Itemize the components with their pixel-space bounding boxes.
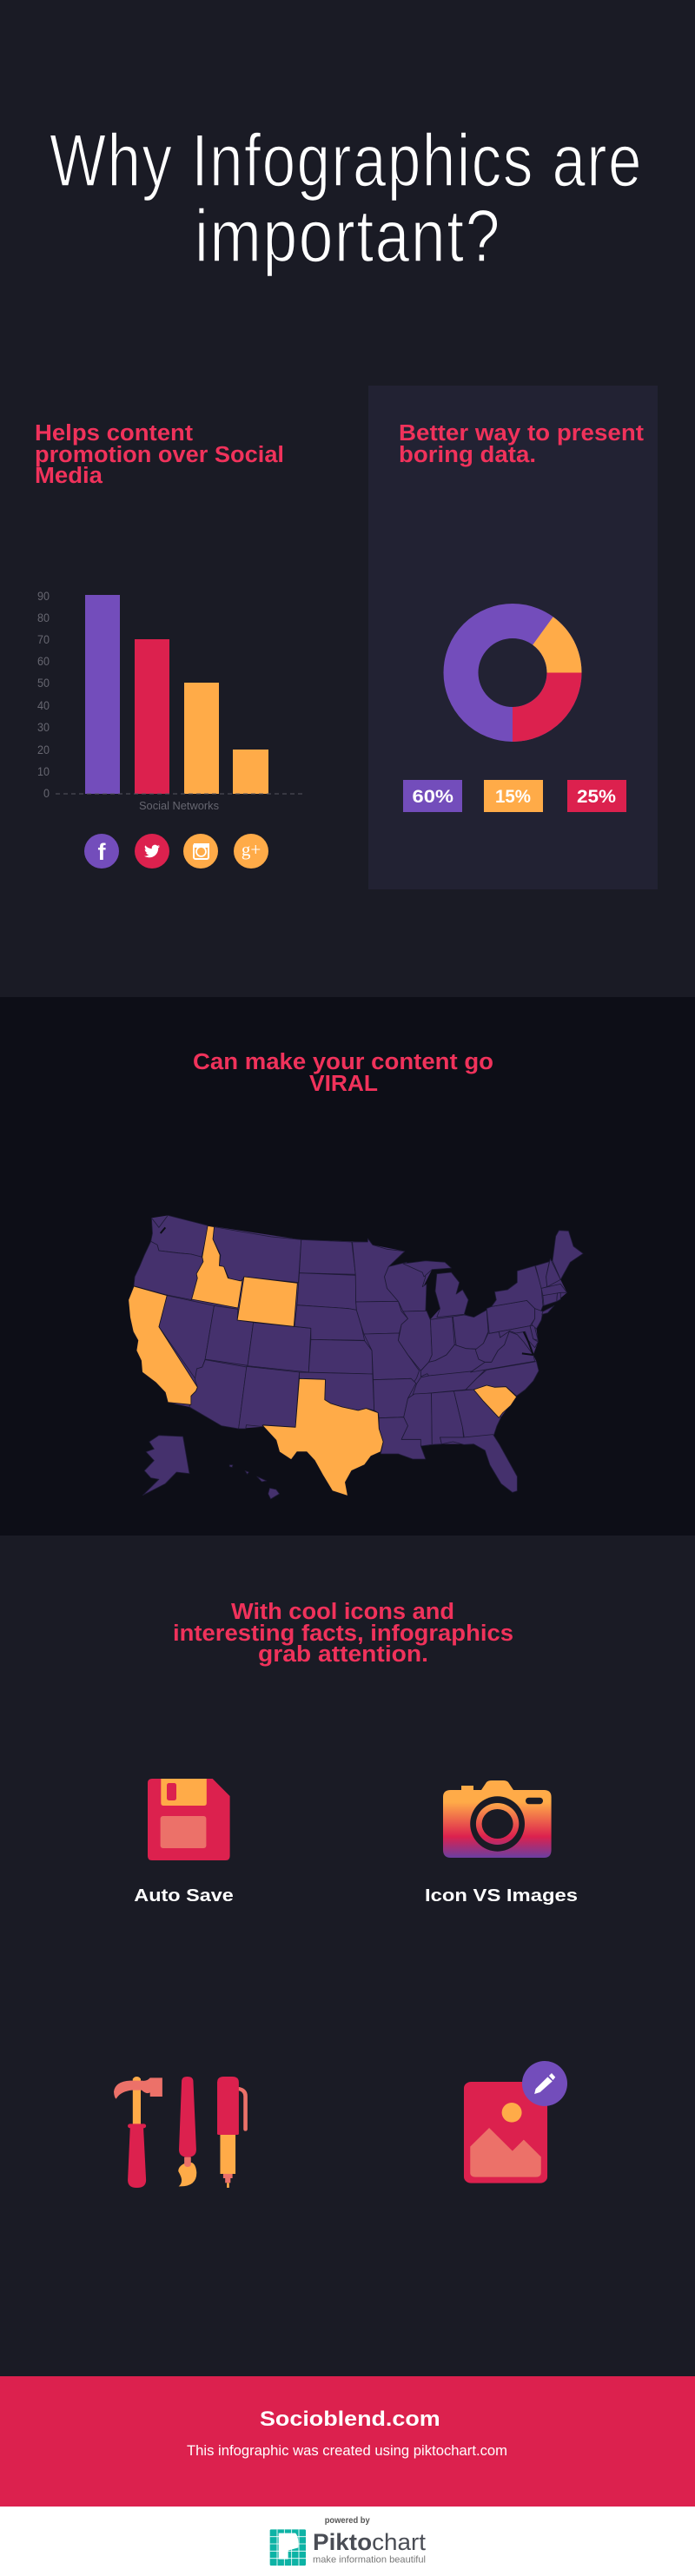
heading: cool icons: [173, 1600, 513, 1667]
legend: 25%: [567, 780, 626, 812]
panel: icons and facts: [114, 1600, 578, 2188]
legend: 25%: 25%: [577, 787, 616, 807]
logo wordmark: Piktochart: [313, 2529, 427, 2555]
powered by footer: [0, 2507, 695, 2576]
bar chart: 60: [37, 655, 50, 668]
legend: 15%: 15%: [495, 787, 531, 807]
footer banner: [0, 2376, 695, 2507]
icon: floppy disk: [148, 1779, 230, 1860]
label: auto save: Auto Save: [134, 1886, 234, 1906]
social icons: [84, 834, 268, 869]
bar chart: 70: [37, 633, 50, 646]
powered by text: powered by: [325, 2516, 370, 2526]
icon: google plus: [234, 834, 268, 869]
US map: [129, 1215, 583, 1499]
title: [50, 120, 643, 278]
heading: viral: VIRAL: [309, 1072, 378, 1096]
icon: tools: [114, 2077, 246, 2188]
label: icon vs images: Icon VS Images: [425, 1886, 578, 1906]
footer title: Socioblend.com: [260, 2408, 440, 2431]
title: important?: [195, 195, 501, 278]
heading: viral: [193, 1050, 493, 1096]
icon: google plus: g+: [242, 839, 261, 860]
bar chart: 40: [37, 699, 50, 712]
bar chart: 10: [37, 765, 50, 778]
heading: cool icons: interesting facts, infographics: [173, 1622, 513, 1646]
donut chart: [460, 617, 582, 742]
heading: cool icons: grab attention.: [258, 1642, 428, 1667]
icon: instagram: [183, 834, 218, 869]
legend: 60%: 60%: [412, 787, 453, 807]
legend: 15%: [484, 780, 543, 812]
heading: helps content promotion: promotion over Social: [35, 443, 284, 467]
heading: helps content promotion: [35, 421, 284, 488]
icon: twitter: [135, 834, 169, 869]
icon: camera: [443, 1780, 552, 1858]
bar chart: 20: [37, 743, 50, 756]
heading: better way: Better way to present: [399, 421, 645, 446]
heading: viral: Can make your content go: [193, 1050, 493, 1074]
bar chart: [37, 590, 302, 812]
footer credit: This infographic was created using piktochart.com: [187, 2442, 507, 2459]
bar chart: 30: [37, 721, 50, 734]
bar chart: 90: [37, 590, 50, 603]
heading: helps content promotion: Media: [35, 464, 103, 488]
heading: better way: [399, 421, 645, 467]
heading: helps content promotion: Helps content: [35, 421, 194, 446]
icon: facebook: [84, 834, 119, 869]
bar chart: 50: [37, 677, 50, 690]
panel: social media promotion: [35, 421, 302, 869]
panel: viral: [0, 997, 695, 1536]
heading: better way: boring data.: [399, 443, 536, 467]
paint brush: [178, 2077, 196, 2186]
logo mark: [270, 2529, 306, 2566]
heading: cool icons: With cool icons and: [231, 1600, 454, 1624]
logo tagline: make information beautiful: [313, 2555, 426, 2566]
hammer: [114, 2077, 162, 2188]
icon: facebook: f: [97, 839, 106, 865]
icon: image with pencil badge: [464, 2061, 567, 2183]
pen: [217, 2077, 246, 2188]
bar chart: 80: [37, 611, 50, 624]
panel: boring data: [368, 386, 658, 889]
legend: 60%: [403, 780, 462, 812]
bar chart: Social Networks: [139, 799, 219, 812]
bar chart: 0: [43, 787, 50, 800]
